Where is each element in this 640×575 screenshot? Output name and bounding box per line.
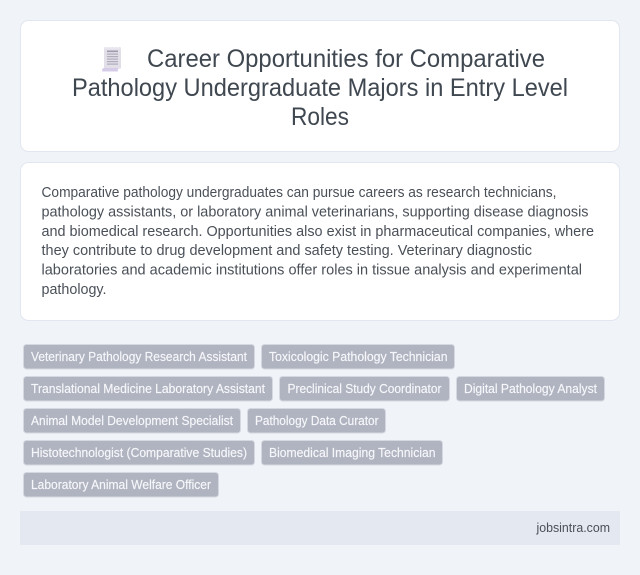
icon: paper scroll [102, 47, 121, 72]
panel: summary paragraph [20, 162, 620, 320]
tag: Biomedical Imaging Technician [262, 440, 442, 465]
tag: Histotechnologist (Comparative Studies) [24, 440, 254, 465]
title text: Pathology Undergraduate Majors in Entry Level [72, 74, 568, 102]
tag: Animal Model Development Specialist [24, 408, 240, 433]
tag: Translational Medicine Laboratory Assistant [24, 376, 272, 401]
tag: Veterinary Pathology Research Assistant [24, 344, 254, 369]
paragraph text: laboratories and academic institutions offer roles in tissue analysis and experimental [42, 262, 582, 278]
title text: Career Opportunities for Comparative [147, 45, 545, 73]
paragraph text: pathology assistants, or laboratory animal veterinarians, supporting disease diagnosis [42, 203, 588, 220]
footer source text: jobsintra.com [536, 521, 610, 535]
tag: Translational Medicine Laboratory Assistant: Translational Medicine Laboratory Assistant [31, 382, 265, 396]
tag: Digital Pathology Analyst: Digital Pathology Analyst [464, 382, 597, 396]
tag: Laboratory Animal Welfare Officer: Laboratory Animal Welfare Officer [31, 478, 211, 492]
tag: Laboratory Animal Welfare Officer [24, 472, 218, 497]
paragraph text: they contribute to drug development and safety testing. Veterinary diagnostic [42, 242, 532, 259]
tag: Animal Model Development Specialist: Animal Model Development Specialist [31, 414, 233, 428]
tag: Pathology Data Curator [248, 408, 386, 433]
tag: Toxicologic Pathology Technician [262, 344, 454, 369]
tag: Preclinical Study Coordinator [280, 376, 450, 401]
paragraph text [42, 184, 594, 298]
panel: title card [20, 20, 620, 152]
tag list: career roles [24, 344, 604, 497]
tag: Histotechnologist (Comparative Studies): Histotechnologist (Comparative Studies) [31, 446, 247, 460]
title text [72, 45, 568, 131]
tag: Pathology Data Curator: Pathology Data Curator [255, 414, 378, 428]
tag: Toxicologic Pathology Technician: Toxicologic Pathology Technician [269, 350, 448, 364]
tag: Veterinary Pathology Research Assistant: Veterinary Pathology Research Assistant [31, 350, 247, 364]
tag: Digital Pathology Analyst [456, 376, 604, 401]
paragraph text: pathology. [42, 281, 106, 298]
paragraph text: and biomedical research. Opportunities also exist in pharmaceutical companies, where [42, 223, 594, 240]
paragraph text: Comparative pathology undergraduates can pursue careers as research technicians, [42, 184, 556, 201]
title text: Roles [291, 103, 349, 131]
footer bar [20, 511, 620, 545]
tag: Biomedical Imaging Technician: Biomedical Imaging Technician [269, 446, 436, 460]
tag: Preclinical Study Coordinator: Preclinical Study Coordinator [288, 382, 442, 396]
